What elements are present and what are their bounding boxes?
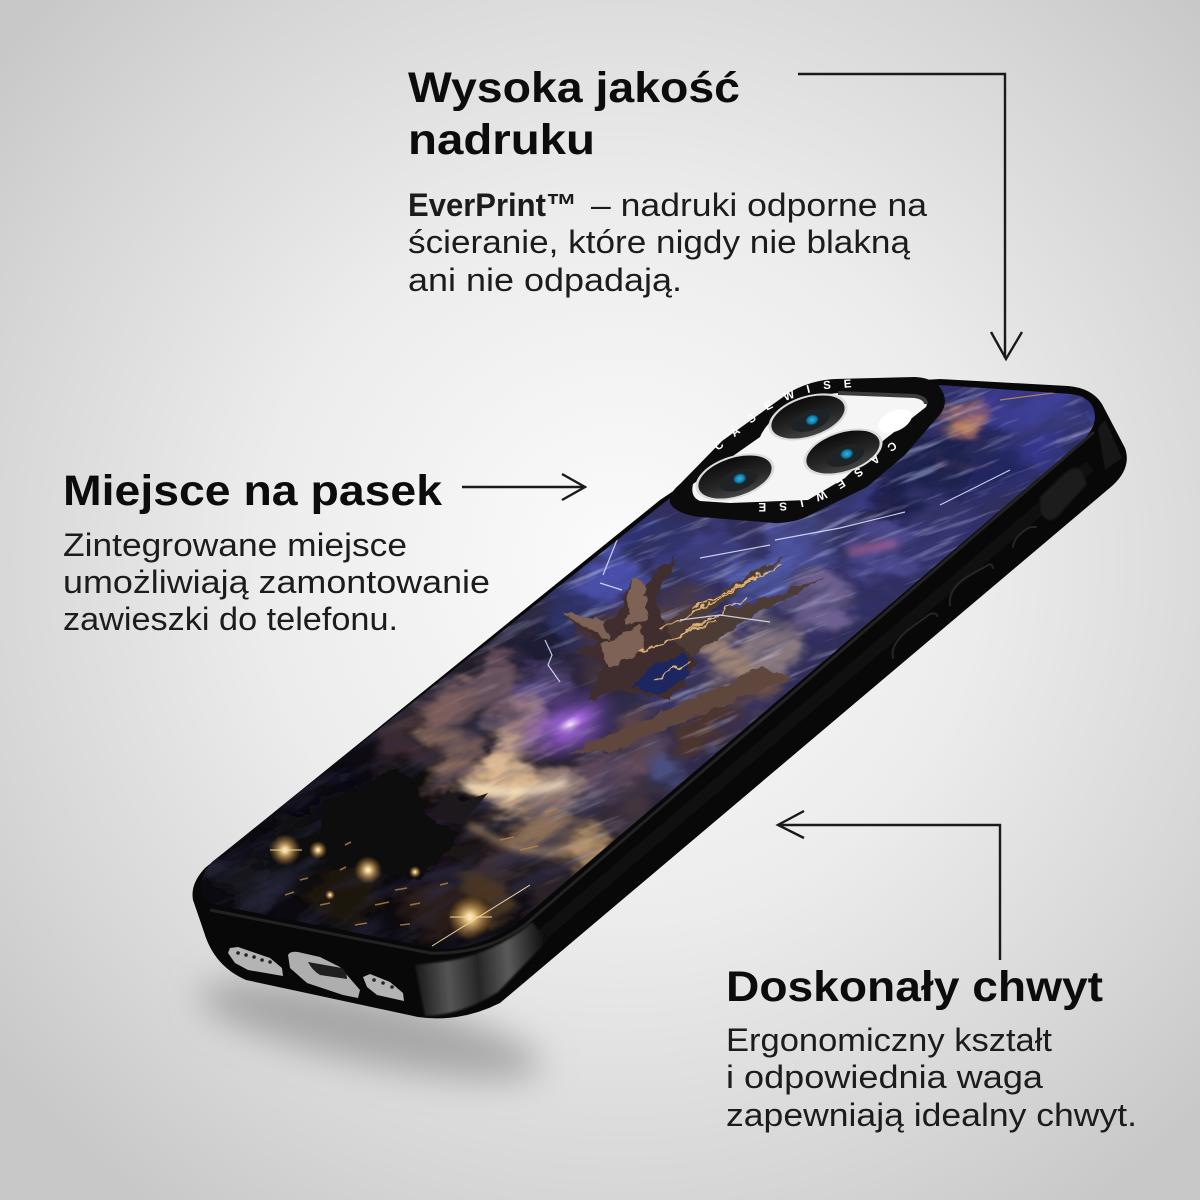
right lens (798, 419, 888, 485)
artwork panel: cosmic storm (202, 385, 1095, 948)
camera ring (670, 377, 945, 523)
lower ridge (567, 668, 793, 752)
streak textures (202, 386, 1094, 948)
phone shadow (192, 960, 548, 1100)
side band highlight (210, 420, 1122, 953)
heading: Doskonały chwyt (726, 963, 1103, 1011)
description: Ergonomiczny kształt (726, 1022, 1052, 1058)
heading (408, 64, 740, 164)
blue scales (632, 655, 690, 695)
description: EverPrint™ (408, 187, 577, 223)
colour cloud mesh (220, 370, 1090, 935)
description: ani nie odpadają. (408, 262, 682, 298)
ring lettering: CASEWISE (715, 379, 852, 450)
camera window (692, 393, 927, 503)
ring lettering: CASEWISE (758, 442, 896, 512)
left speaker (228, 947, 283, 976)
left lens (690, 444, 780, 510)
description: Zintegrowane miejsce (63, 527, 407, 563)
strap slot on side (1040, 468, 1087, 520)
callout: strap place (63, 467, 490, 637)
gold highlights (640, 565, 780, 680)
description: zapewniają idealny chwyt. (726, 1097, 1137, 1133)
arrow: to strap place (462, 474, 585, 500)
purple galaxy glow (520, 686, 620, 764)
camera bump (670, 377, 945, 523)
bright swirl bands (465, 418, 985, 852)
heading: Wysoka jakość (408, 64, 740, 112)
phone case (192, 377, 1127, 1018)
description: – nadruki odporne na (591, 187, 927, 223)
heading: Miejsce na pasek (63, 467, 442, 515)
description: i odpowiednia waga (726, 1059, 1043, 1095)
arrow: to phone side (778, 811, 1000, 960)
case body (192, 379, 1127, 1018)
gold flecks (285, 809, 557, 925)
window highlight (874, 404, 916, 438)
rider silhouette and rock (320, 768, 488, 880)
description (726, 1022, 1137, 1133)
description (63, 527, 490, 637)
description (408, 187, 927, 298)
callout: perfect grip (726, 963, 1137, 1133)
dragon creature (560, 553, 827, 752)
star glints (269, 834, 530, 946)
description: ścieranie, które nigdy nie blakną (408, 224, 910, 260)
heading: nadruku (408, 116, 595, 164)
tan plates (560, 578, 648, 668)
side buttons (893, 527, 1036, 658)
glossy bottom corner (415, 922, 548, 1016)
lightning streaks (545, 392, 1060, 682)
top lens (763, 384, 853, 450)
usb port (288, 952, 360, 998)
wings (664, 554, 824, 656)
description: umożliwiają zamontowanie (63, 564, 490, 600)
right speaker (363, 974, 404, 1001)
body (560, 553, 700, 700)
arrow: to print surface (798, 74, 1022, 359)
ring lettering (715, 379, 896, 512)
bottom ports (228, 947, 404, 1001)
callout: print quality (408, 64, 927, 298)
description: zawieszki do telefonu. (63, 601, 398, 637)
ring inner bevel (838, 393, 926, 404)
